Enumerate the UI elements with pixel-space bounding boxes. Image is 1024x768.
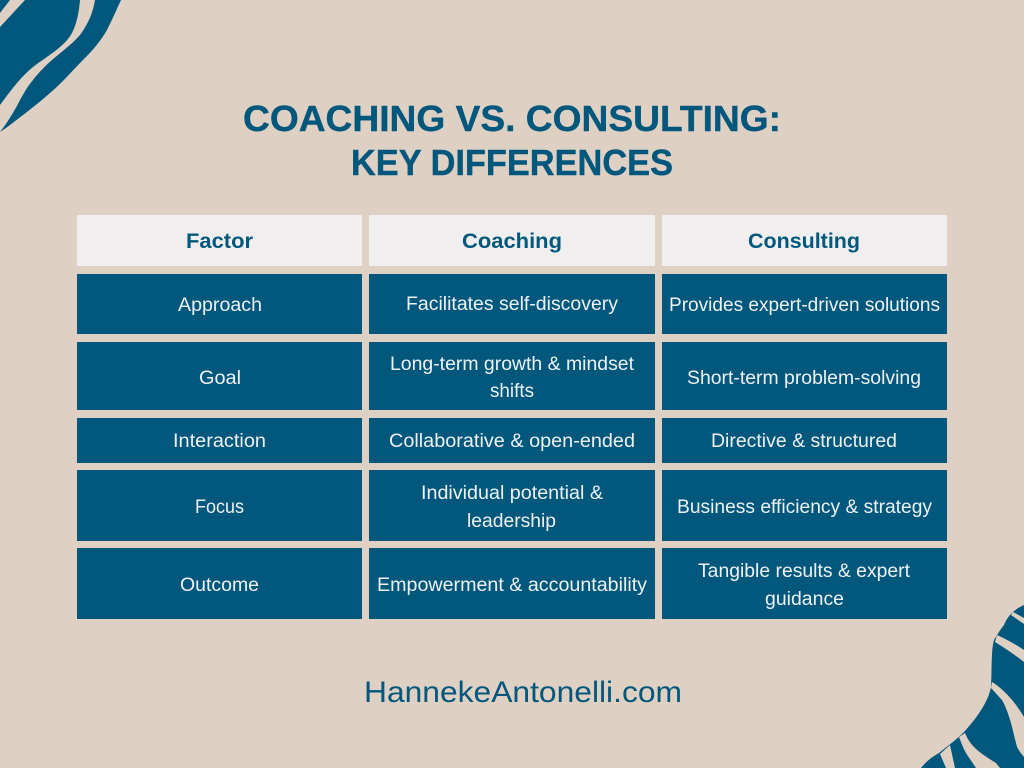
header cell: Consulting: Consulting — [748, 230, 860, 253]
cell: Goal coaching — [369, 342, 655, 410]
row: Focus — [77, 470, 947, 541]
cell: Approach factor — [77, 274, 362, 334]
cell: Interaction consulting — [662, 418, 947, 463]
title: COACHING VS. CONSULTING: — [243, 98, 781, 139]
cell: Approach coaching — [369, 274, 655, 334]
decoration: bottom-right leaf — [921, 605, 1024, 768]
cell: Focus coaching: Individual potential & — [421, 483, 603, 504]
cell: Approach consulting — [662, 274, 947, 334]
cell: Outcome factor: Outcome — [180, 575, 259, 596]
cell: Outcome factor — [77, 548, 362, 619]
header cell: Coaching — [369, 215, 655, 266]
decoration: top-left leaf — [0, 0, 121, 132]
header cell: Factor: Factor — [186, 230, 253, 253]
cell: Approach coaching: Facilitates self-discovery — [406, 294, 619, 315]
cell: Goal consulting: Short-term problem-solving — [687, 368, 921, 389]
cell: Interaction coaching: Collaborative & open-ended — [389, 431, 635, 452]
cell: Focus consulting: Business efficiency & strategy — [677, 497, 933, 518]
comparison table — [77, 215, 947, 619]
title — [243, 98, 781, 183]
cell: Approach consulting: Provides expert-driven solutions — [669, 295, 940, 316]
cell: Goal consulting — [662, 342, 947, 410]
cell: Interaction factor: Interaction — [173, 431, 266, 452]
cell: Focus consulting — [662, 470, 947, 541]
row: Interaction — [77, 418, 947, 463]
row: Outcome — [77, 548, 947, 619]
cell: Outcome consulting — [662, 548, 947, 619]
cell: Outcome consulting: guidance — [765, 589, 844, 610]
cell: Focus factor: Focus — [195, 497, 244, 518]
cell: Goal factor — [77, 342, 362, 410]
cell: Outcome consulting: Tangible results & expert — [698, 561, 911, 582]
cell: Approach factor: Approach — [178, 295, 262, 316]
cell: Interaction coaching — [369, 418, 655, 463]
cell: Outcome coaching: Empowerment & accountability — [377, 575, 648, 596]
row: Approach — [77, 274, 947, 334]
header cell: Consulting — [662, 215, 947, 266]
cell: Focus coaching — [369, 470, 655, 541]
cell: Goal factor: Goal — [199, 368, 241, 389]
cell: Goal coaching: shifts — [490, 381, 534, 402]
row: Goal — [77, 342, 947, 410]
title: KEY DIFFERENCES — [351, 142, 673, 183]
cell: Focus coaching: leadership — [467, 511, 556, 532]
header row — [77, 215, 947, 266]
cell: Interaction factor — [77, 418, 362, 463]
cell: Outcome coaching — [369, 548, 655, 619]
cell: Focus factor — [77, 470, 362, 541]
cell: Interaction consulting: Directive & structured — [711, 431, 897, 452]
header cell: Coaching: Coaching — [462, 230, 562, 253]
header cell: Factor — [77, 215, 362, 266]
cell: Goal coaching: Long-term growth & mindset — [390, 354, 635, 375]
footer website: HannekeAntonelli.com — [364, 676, 682, 709]
